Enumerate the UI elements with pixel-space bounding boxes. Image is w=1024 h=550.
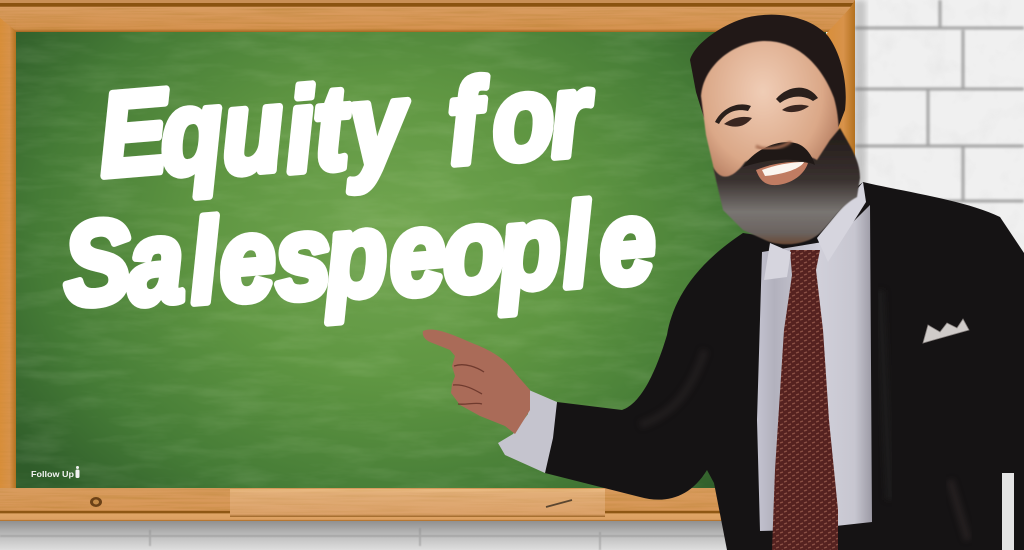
pocket square [923,319,969,343]
logo: Follow Up: Follow Up [31,469,74,479]
jacket texture [640,290,968,540]
hair [690,15,846,128]
head [690,15,860,244]
jacket [545,182,1024,550]
left eyebrow [715,104,751,124]
beard [713,128,860,244]
collar [764,182,866,280]
logo: Follow Up [31,466,80,479]
finger creases [453,365,484,404]
title line 1: Equity for [96,48,598,202]
wooden frame [0,0,855,521]
eyes [724,117,752,127]
nose [756,141,791,149]
title line 2: Salespeople [60,175,659,332]
shirt [757,205,872,531]
face [701,41,839,210]
presenter [423,15,1024,550]
hand [423,330,530,434]
board surface [16,31,826,491]
chalk ledge [230,489,605,517]
gap between arm and body [1002,473,1014,550]
right eyebrow [776,88,818,103]
chalkboard with wooden frame [0,0,855,521]
moustache and mouth [743,142,815,185]
tie [772,250,838,550]
title [60,48,659,332]
shirt cuff [498,390,557,473]
